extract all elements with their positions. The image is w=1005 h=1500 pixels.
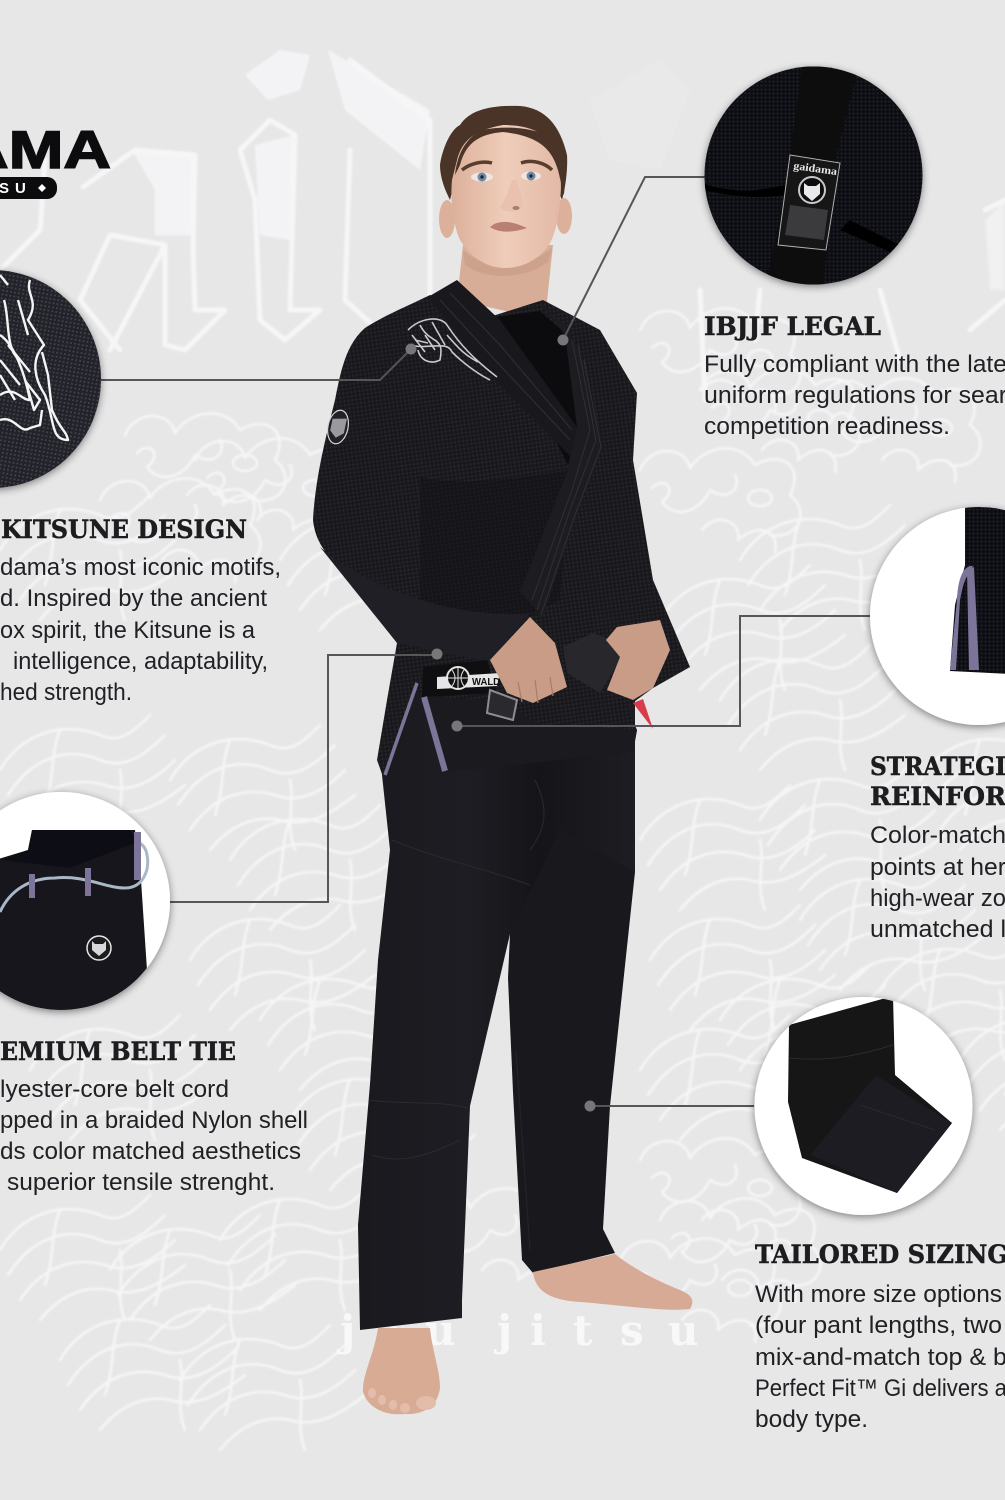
ibjjf body text: Fully compliant with the late xyxy=(704,351,1005,378)
kitsune body text: d. Inspired by the ancient xyxy=(0,585,267,612)
eyes xyxy=(471,172,541,182)
athlete figure xyxy=(313,106,692,1414)
belt label patch xyxy=(437,667,500,689)
sleeve cuff edge xyxy=(320,547,530,662)
belt label patch: WALD xyxy=(472,677,500,688)
sleeve patch xyxy=(325,408,351,446)
folded pants detail circle xyxy=(754,996,972,1215)
kitsune heading: KITSUNE DESIGN xyxy=(1,515,247,544)
kitsune body text: ox spirit, the Kitsune is a xyxy=(0,617,256,644)
panel: ibjjf legal xyxy=(700,60,1005,440)
reinforcement heading xyxy=(870,752,1005,811)
reinforcement body text: unmatched l xyxy=(870,916,1005,943)
logo pill xyxy=(0,177,57,199)
front foot xyxy=(363,1328,440,1414)
neck xyxy=(457,245,553,320)
reinforcement body text: high-wear zo xyxy=(870,885,1005,912)
left lapel xyxy=(428,280,577,462)
reinforcement body text: points at her xyxy=(870,854,1005,881)
left sleeve and torso xyxy=(313,295,690,777)
ears xyxy=(439,198,572,238)
kitsune body text: intelligence, adaptability, xyxy=(13,648,268,675)
kitsune detail circle xyxy=(0,270,101,488)
hair back xyxy=(440,106,567,200)
back pant leg xyxy=(508,730,635,1273)
belt knot xyxy=(563,633,625,693)
right hand xyxy=(606,620,670,700)
nose xyxy=(500,180,523,212)
kitsune body text: dama’s most iconic motifs, xyxy=(0,554,281,581)
kitsune body text: hed strength. xyxy=(0,679,132,706)
shoulder fox embroidery xyxy=(408,319,497,380)
t-shirt xyxy=(490,311,578,465)
tailored body text xyxy=(755,1281,1005,1433)
watermark: jiu jitsu lettering: jiujitsu xyxy=(336,1306,699,1355)
front pant leg xyxy=(358,680,635,1330)
tailored body text: With more size options xyxy=(755,1281,1002,1308)
chest seam xyxy=(420,470,570,640)
brows xyxy=(462,161,552,170)
belt tie detail circle xyxy=(0,792,170,1020)
panel: tailored sizing xyxy=(754,996,1005,1433)
knuckle shading xyxy=(518,677,553,703)
reinforcement body text: Color-match xyxy=(870,822,1005,849)
toes xyxy=(368,1388,436,1413)
tailored body text: (four pant lengths, two xyxy=(755,1312,1002,1339)
panel: premium belt tie xyxy=(0,792,308,1196)
belt tie body text xyxy=(0,1076,308,1196)
tailored body text: mix-and-match top & b xyxy=(755,1344,1005,1371)
ibjjf body text: competition readiness. xyxy=(704,413,950,440)
hanging belt end xyxy=(487,690,517,720)
right foot xyxy=(533,1254,692,1310)
left hand xyxy=(490,617,567,703)
reinforcement body text xyxy=(870,822,1005,943)
belt tie body text: pped in a braided Nylon shell xyxy=(0,1107,308,1134)
kitsune body text xyxy=(0,554,281,706)
belt tie body text: lyester-core belt cord xyxy=(0,1076,229,1103)
lapel stitching xyxy=(440,293,601,615)
belt tie body text: ds color matched aesthetics xyxy=(0,1138,301,1165)
ibjjf body text: uniform regulations for sear xyxy=(704,382,1005,409)
reinforcement heading: REINFOR xyxy=(870,782,1005,811)
mouth xyxy=(490,222,527,232)
panel: kitsune design xyxy=(0,270,281,706)
ibjjf detail circle xyxy=(700,60,922,290)
hair fringe xyxy=(455,128,564,195)
neck shadow xyxy=(463,248,552,276)
panel: strategic reinforcement xyxy=(870,507,1005,943)
belt black strip xyxy=(422,660,497,697)
ibjjf body text xyxy=(704,351,1005,440)
belt tie body text: superior tensile strenght. xyxy=(7,1169,275,1196)
ibjjf detail circle: gaidama xyxy=(793,160,838,178)
tailored body text: body type. xyxy=(755,1406,868,1433)
right lapel xyxy=(520,303,603,617)
red tab xyxy=(633,699,653,729)
pant seams xyxy=(370,780,544,1250)
belt tie heading: EMIUM BELT TIE xyxy=(0,1037,236,1066)
ibjjf heading: IBJJF LEGAL xyxy=(704,312,881,341)
nostril xyxy=(512,206,520,210)
purple side reinforcement xyxy=(385,683,445,775)
reinforcement detail circle xyxy=(870,507,1005,725)
face xyxy=(451,125,561,268)
hem and jacket tail xyxy=(422,697,637,772)
callout dots xyxy=(406,334,596,1112)
logo xyxy=(0,121,111,199)
